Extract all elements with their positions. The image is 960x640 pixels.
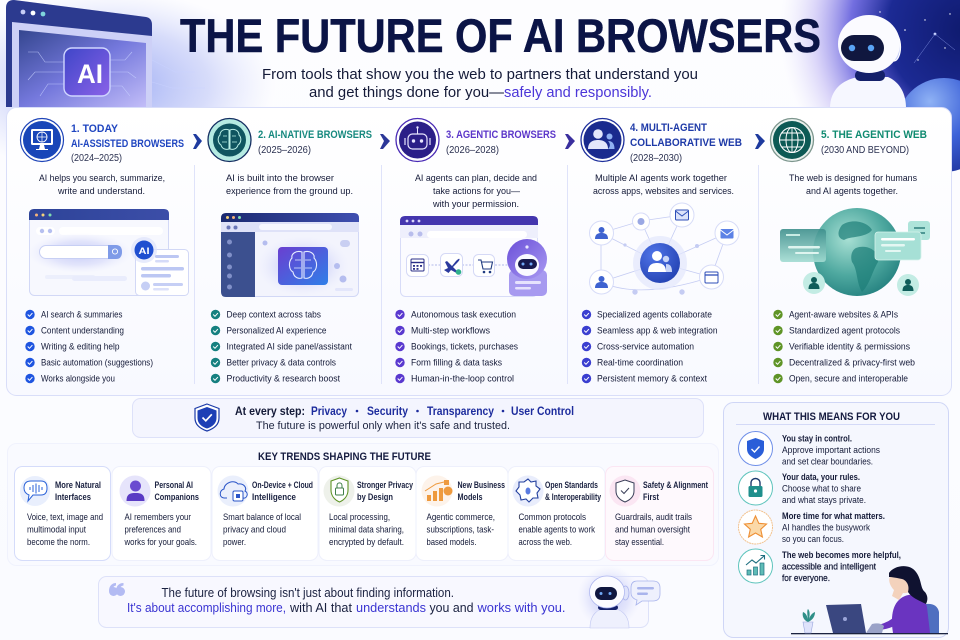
card: AI companions: AI remembers your (124, 512, 191, 522)
feature list: Content understanding (41, 326, 124, 336)
feature list (773, 310, 915, 384)
stage 5: The agentic web (770, 118, 930, 384)
quote text: works with you. (476, 601, 566, 615)
card: open standards: across the web. (518, 537, 572, 547)
card: safety and alignment: Guardrails, audit trails (615, 512, 692, 522)
card: AI companions: Personal AI (154, 480, 193, 490)
description: across apps, websites and services. (593, 186, 734, 197)
heading: (2026–2028) (446, 145, 499, 156)
header glow: left (0, 0, 275, 180)
feature list: Autonomous task execution (411, 310, 516, 320)
quote text: The future of browsing isn't just about finding information. (162, 586, 454, 600)
heading: (2028–2030) (630, 153, 682, 164)
illustration: AI browser window (6, 0, 205, 107)
heading: COLLABORATIVE WEB (630, 137, 742, 149)
feature list: Cross-service automation (597, 342, 694, 352)
heading: (2030 AND BEYOND) (821, 145, 909, 156)
card: business models: Agentic commerce, (426, 512, 495, 522)
benefit: data: Choose what to share (782, 484, 861, 494)
callout: safety principles bar (132, 398, 704, 438)
feature list: Productivity & research boost (226, 374, 340, 384)
card: natural interfaces: Voice, text, image and (27, 512, 103, 522)
illustration: task workflow with robot (400, 216, 547, 296)
card: AI companions: Companions (154, 492, 199, 502)
feature list: Basic automation (suggestions) (41, 358, 153, 368)
quote text: understands (356, 601, 426, 615)
header art: night sky (760, 0, 960, 130)
icon: brain (208, 118, 251, 162)
arrow: stage 4 to 5 (755, 134, 765, 149)
stage 3: Agentic browsers (395, 118, 556, 384)
illustration: AI browser window: AI (77, 59, 103, 89)
principles: Security (367, 406, 409, 418)
card: business models (416, 466, 508, 560)
quote text: with AI that (289, 601, 352, 615)
heading (71, 123, 184, 164)
description (39, 173, 165, 197)
illustration: planet (897, 78, 960, 172)
description: experience from the ground up. (226, 186, 353, 197)
icon: people (581, 118, 624, 162)
title: THE FUTURE OF AI BROWSERS (180, 9, 821, 62)
illustration: teal globe with panels (780, 208, 930, 296)
card: privacy by design: Stronger Privacy (357, 480, 413, 490)
quote text: It's about accomplishing more, (127, 601, 286, 615)
description: AI is built into the browser (226, 173, 335, 184)
card: privacy by design: minimal data sharing, (329, 524, 404, 534)
benefit: control: You stay in control. (782, 434, 852, 444)
benefit: control (738, 432, 880, 468)
card: AI companions: preferences and (124, 524, 181, 534)
heading (258, 129, 372, 156)
illustration: small robot with speech bubble (577, 565, 660, 629)
description: with your permission. (432, 199, 519, 210)
stage 1: AI-assisted browsers (20, 118, 188, 384)
stage 4: Multi-agent collaborative web (581, 118, 742, 384)
description: write and understand. (57, 186, 145, 197)
card: privacy by design: encrypted by default. (329, 537, 404, 547)
heading: 1. TODAY (71, 123, 118, 135)
icon: globe (770, 118, 814, 162)
feature list: Open, secure and interoperable (789, 374, 908, 384)
heading (446, 129, 556, 156)
feature list: Form filling & data tasks (411, 358, 502, 368)
card: safety and alignment (606, 466, 714, 560)
card: on-device and cloud: Smart balance of local (223, 512, 301, 522)
stage 2: AI-native browsers (208, 118, 372, 384)
principles: At every step: (235, 406, 305, 418)
card: on-device and cloud: On-Device + Cloud (252, 480, 313, 490)
benefit: helpful web: The web becomes more helpful, (782, 550, 901, 561)
card: natural interfaces: More Natural (55, 480, 101, 490)
feature list: Bookings, tickets, purchases (411, 342, 518, 352)
icon: quotation mark (109, 583, 125, 596)
feature list: Writing & editing help (41, 342, 120, 352)
card: open standards (508, 466, 605, 560)
illustration: woman at laptop (791, 566, 948, 634)
card: on-device and cloud: privacy and cloud (223, 524, 286, 534)
principles: Privacy (311, 406, 348, 418)
card: business models: based models. (426, 537, 476, 547)
subtitle: safely and responsibly. (504, 84, 652, 101)
feature list: Integrated AI side panel/assistant (226, 342, 352, 352)
card: business models: Models (458, 492, 482, 502)
icon: monitor with globe (20, 118, 64, 162)
illustration: agent network (590, 203, 739, 295)
description (415, 173, 537, 210)
quote text: you and (430, 601, 474, 615)
benefit: helpful web (738, 549, 901, 584)
card: natural interfaces: Interfaces (55, 492, 91, 502)
quote text (127, 586, 566, 615)
icon: robot (396, 118, 439, 162)
card: safety and alignment: stay essential. (615, 537, 664, 547)
feature list: Multi-step workflows (411, 326, 490, 336)
subtitle: From tools that show you the web to partners that understand you (262, 66, 698, 83)
heading: 2. AI-NATIVE BROWSERS (258, 129, 372, 141)
card: natural interfaces: multimodal input (27, 524, 86, 534)
card: open standards: enable agents to work (518, 524, 595, 534)
benefit: time: AI handles the busywork (782, 522, 870, 534)
feature list (25, 310, 153, 384)
card: natural interfaces (14, 466, 110, 560)
description: take actions for you— (433, 186, 520, 197)
principles: Transparency (427, 406, 495, 418)
card: business models: New Business (458, 480, 505, 490)
benefit: data: and what stays private. (782, 495, 866, 506)
benefit: control: Approve important actions (782, 445, 880, 456)
card: privacy by design: Local processing, (329, 512, 390, 522)
illustration: browser with search and AI card: AI (138, 246, 150, 257)
panel: what this means for you (724, 402, 948, 638)
callout: closing quote (98, 565, 660, 629)
benefit: data (738, 471, 866, 506)
description: and AI agents together. (806, 186, 898, 197)
benefit: helpful web: accessible and intelligent (782, 562, 876, 572)
feature list: Human-in-the-loop control (411, 374, 514, 384)
card: safety and alignment: and human oversight (615, 524, 690, 534)
arrow: stage 3 to 4 (565, 134, 575, 149)
heading: 5. THE AGENTIC WEB (821, 129, 927, 141)
feature list (211, 310, 352, 384)
arrow: stage 2 to 3 (380, 134, 390, 149)
panel: evolution stages (6, 108, 952, 396)
description: AI helps you search, summarize, (39, 173, 165, 184)
description (226, 173, 353, 197)
heading (630, 122, 742, 164)
benefit: time (738, 510, 885, 545)
benefit: helpful web: for everyone. (782, 573, 830, 584)
feature list: Deep context across tabs (226, 310, 321, 320)
description: AI agents can plan, decide and (415, 173, 537, 184)
card: on-device and cloud: Intelligence (252, 492, 296, 502)
feature list (395, 310, 518, 384)
heading: WHAT THIS MEANS FOR YOU (763, 411, 900, 423)
heading: AI-ASSISTED BROWSERS (71, 138, 184, 150)
heading (821, 129, 927, 156)
illustration: hero robot (830, 15, 906, 108)
description: The web is designed for humans (789, 173, 917, 184)
feature list: Persistent memory & context (597, 374, 707, 384)
description (789, 173, 917, 197)
card: privacy by design (319, 466, 416, 560)
card: natural interfaces: become the norm. (27, 537, 90, 547)
card: open standards: & Interoperability (545, 492, 601, 502)
feature list: Verifiable identity & permissions (789, 342, 910, 352)
subtitle: and get things done for you— (309, 84, 504, 101)
heading: 4. MULTI-AGENT (630, 122, 707, 134)
card: on-device and cloud: power. (223, 537, 246, 547)
benefit: time: so you can focus. (782, 534, 844, 545)
card: on-device and cloud (212, 466, 318, 560)
card: safety and alignment: First (643, 492, 659, 502)
heading: (2024–2025) (71, 153, 122, 164)
benefit: control: and set clear boundaries. (782, 456, 873, 468)
card: privacy by design: by Design (357, 492, 393, 502)
feature list: Agent-aware websites & APIs (789, 310, 898, 320)
feature list: Better privacy & data controls (226, 358, 336, 368)
card: safety and alignment: Safety & Alignment (643, 480, 708, 490)
feature list: Decentralized & privacy-first web (789, 358, 915, 368)
description (593, 173, 734, 197)
benefit: data: Your data, your rules. (782, 472, 860, 483)
illustration: browser with search and AI card (28, 209, 188, 296)
heading: KEY TRENDS SHAPING THE FUTURE (258, 451, 431, 463)
card: open standards: Open Standards (545, 480, 598, 490)
feature list: Specialized agents collaborate (597, 310, 712, 320)
principles (235, 406, 574, 432)
feature list: Standardized agent protocols (789, 326, 900, 336)
principles: The future is powerful only when it's safe and trusted. (256, 420, 510, 432)
description: Multiple AI agents work together (595, 173, 728, 184)
feature list (582, 310, 718, 384)
arrow: stage 1 to 2 (193, 134, 202, 149)
heading: 3. AGENTIC BROWSERS (446, 129, 556, 141)
icon: shield (195, 404, 219, 431)
principles: User Control (511, 406, 574, 418)
feature list: Works alongside you (41, 374, 115, 384)
card: AI companions: works for your goals. (124, 537, 197, 547)
card: open standards: Common protocols (518, 512, 586, 522)
subtitle (262, 66, 698, 101)
benefit: time: More time for what matters. (782, 511, 885, 522)
feature list: Seamless app & web integration (597, 326, 718, 336)
feature list: AI search & summaries (41, 310, 123, 320)
feature list: Real-time coordination (597, 358, 683, 368)
heading: (2025–2026) (258, 145, 311, 156)
illustration: browser with brain tile (221, 213, 359, 297)
feature list: Personalized AI experience (226, 326, 326, 336)
card: AI companions (112, 466, 211, 560)
card: business models: subscriptions, task- (426, 524, 494, 534)
panel: key trends (8, 444, 718, 566)
